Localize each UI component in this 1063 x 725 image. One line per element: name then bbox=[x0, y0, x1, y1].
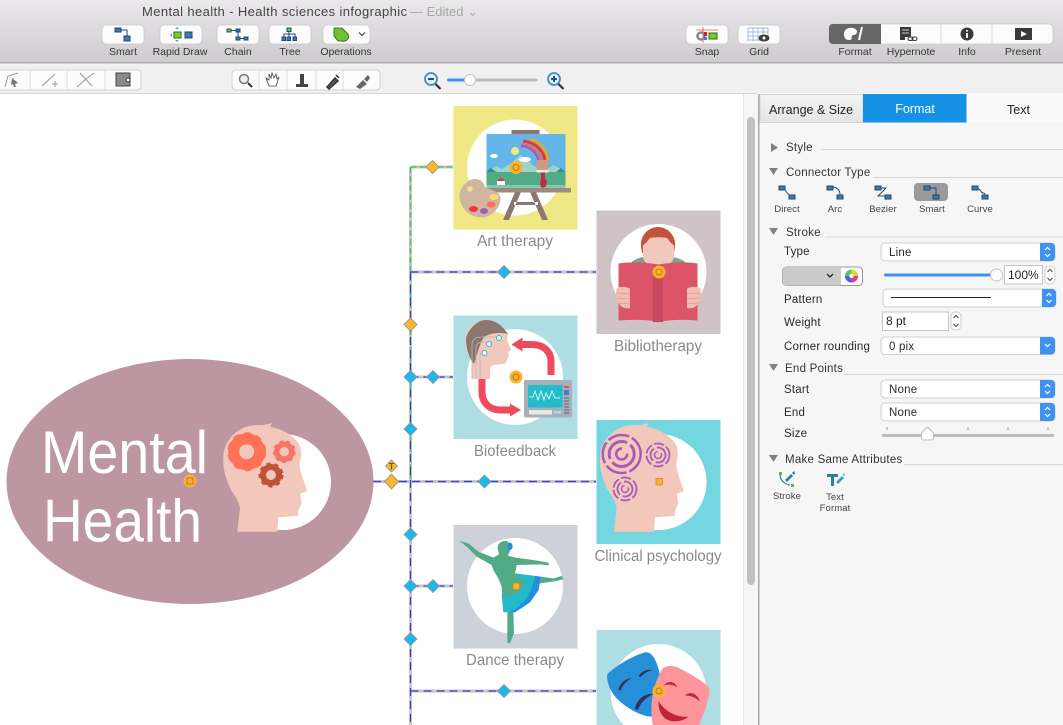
option: Direct: Direct bbox=[774, 204, 800, 215]
canvas scrollbar bbox=[743, 94, 758, 725]
connector lines bbox=[373, 167, 596, 725]
node: Clinical psychology bbox=[594, 420, 722, 565]
edited status: — Edited ⌄ bbox=[410, 4, 478, 19]
selection marker bbox=[184, 474, 196, 488]
option: Direct bbox=[774, 186, 800, 215]
select: End bbox=[881, 403, 1055, 421]
document title: Mental health - Health sciences infographic bbox=[142, 4, 408, 19]
button: Chain bbox=[217, 25, 259, 58]
select: Line bbox=[881, 243, 1055, 261]
button: Smart: Smart bbox=[109, 46, 137, 58]
section: Style bbox=[771, 142, 1063, 154]
icon: head, monitor and arrows bbox=[465, 320, 572, 425]
label: Present: Present bbox=[1005, 46, 1041, 58]
label: Weight: Weight bbox=[784, 317, 821, 329]
label: Size: Size bbox=[784, 428, 807, 440]
select: Start bbox=[881, 380, 1055, 398]
connector handles bbox=[384, 160, 510, 698]
icon: ballerina bbox=[459, 538, 564, 643]
icon: palette bbox=[844, 28, 857, 40]
button: Snap: Snap bbox=[695, 46, 719, 58]
tile bbox=[454, 106, 578, 230]
icon: head with gears bbox=[223, 423, 331, 532]
option: Arc bbox=[827, 186, 843, 215]
icon: info bbox=[960, 28, 974, 40]
select: Line: Line bbox=[889, 247, 912, 259]
action: Text Format: Text bbox=[826, 492, 844, 503]
size slider bbox=[882, 427, 1054, 440]
selection marker bbox=[510, 370, 522, 384]
label: End: End bbox=[784, 407, 805, 419]
option: Curve: Curve bbox=[967, 204, 993, 215]
icon: hypernote bbox=[900, 27, 917, 40]
secondary toolbar bbox=[0, 64, 1063, 94]
icon: brush stroke bbox=[859, 27, 862, 40]
colour well bbox=[782, 267, 862, 286]
section: Connector Type: Connector Type bbox=[786, 167, 870, 179]
action: Stroke: Stroke bbox=[773, 491, 801, 502]
button: Snap bbox=[686, 25, 728, 58]
icon: present bbox=[1015, 28, 1032, 40]
icon: theatre masks bbox=[607, 644, 709, 725]
label: Dance therapy bbox=[466, 652, 564, 669]
select: Pattern bbox=[883, 289, 1056, 307]
field: Weight: 8 pt bbox=[886, 314, 907, 328]
button: Rapid Draw: Rapid Draw bbox=[153, 46, 208, 58]
section: Make Same Attributes bbox=[769, 454, 1063, 514]
opacity field bbox=[1004, 266, 1055, 284]
segmented control: Format Hypernote Info Present bbox=[829, 24, 1053, 58]
tab: Arrange & Size: Arrange & Size bbox=[769, 103, 853, 117]
section: Style: Style bbox=[786, 142, 813, 154]
field: Weight bbox=[882, 312, 961, 330]
action: Stroke bbox=[773, 471, 801, 502]
title: Mental: Mental bbox=[41, 419, 208, 486]
label: Hypernote: Hypernote bbox=[887, 46, 935, 58]
option: Bezier bbox=[869, 186, 897, 215]
label: Art therapy bbox=[477, 233, 553, 250]
action: Text Format: Format bbox=[820, 503, 851, 514]
select: Corner rounding bbox=[881, 337, 1055, 354]
selection marker bbox=[513, 583, 520, 590]
node: Dance therapy bbox=[454, 525, 578, 669]
label: Clinical psychology bbox=[594, 548, 722, 565]
label: Start: Start bbox=[784, 384, 810, 396]
option: Smart selected bbox=[914, 183, 948, 215]
section: Stroke: Stroke bbox=[786, 227, 821, 239]
select: Start: None bbox=[889, 384, 917, 396]
title: Health: Health bbox=[43, 488, 202, 554]
section: End Points bbox=[769, 363, 1063, 440]
button: Operations: Operations bbox=[320, 46, 372, 58]
tile bbox=[596, 210, 720, 334]
node: Bibliotherapy bbox=[596, 210, 720, 355]
icon: head with swirls bbox=[600, 423, 706, 532]
select: End: None bbox=[889, 407, 917, 419]
select: Corner rounding: 0 pix bbox=[889, 341, 914, 353]
tab: Format bbox=[863, 94, 966, 122]
button: Smart bbox=[102, 25, 144, 58]
button: Tree: Tree bbox=[279, 46, 301, 58]
root node: Mental Health bbox=[6, 359, 374, 604]
drawing tools group bbox=[0, 70, 141, 90]
button: Chain: Chain bbox=[224, 46, 252, 58]
tab: Arrange & Size bbox=[760, 94, 863, 122]
tab: Format: Format bbox=[895, 102, 935, 116]
label: Biofeedback bbox=[474, 443, 557, 460]
opacity slider bbox=[884, 269, 1002, 281]
zoom in icon bbox=[548, 73, 564, 89]
icon: person reading book bbox=[610, 224, 706, 322]
button: Grid: Grid bbox=[749, 46, 769, 58]
label: Info: Info bbox=[958, 46, 976, 58]
canvas tools group bbox=[232, 70, 380, 90]
zoom out icon bbox=[425, 73, 440, 89]
selection marker bbox=[652, 684, 666, 698]
icon: easel and palette bbox=[459, 120, 571, 220]
option: Smart selected: Smart bbox=[919, 204, 945, 215]
section: Make Same Attributes: Make Same Attributes bbox=[785, 454, 902, 466]
selection marker bbox=[656, 478, 662, 485]
tile bbox=[454, 525, 578, 648]
section: Connector Type bbox=[769, 167, 1063, 215]
option: Curve bbox=[967, 186, 993, 215]
selection marker bbox=[652, 266, 666, 278]
tile bbox=[596, 420, 720, 544]
tab: Text: Text bbox=[1007, 103, 1030, 117]
label: Corner rounding: Corner rounding bbox=[784, 341, 870, 353]
text handle glyph: T bbox=[389, 462, 395, 472]
ellipse bbox=[6, 359, 374, 604]
zoom slider bbox=[447, 74, 538, 86]
label: Pattern: Pattern bbox=[784, 294, 822, 306]
tile bbox=[454, 316, 578, 439]
format panel bbox=[758, 94, 1063, 725]
label: Format: Format bbox=[838, 46, 872, 58]
action: Text Format bbox=[820, 473, 851, 514]
button: Grid bbox=[738, 25, 780, 58]
option: Bezier: Bezier bbox=[869, 204, 897, 215]
button: Operations bbox=[320, 25, 372, 58]
node: Drama therapy tile bbox=[596, 630, 720, 725]
node: Art therapy bbox=[454, 106, 578, 250]
opacity field: 100% bbox=[1008, 268, 1039, 282]
label: Type: Type bbox=[784, 246, 810, 258]
section: Stroke bbox=[769, 227, 1063, 354]
button: Tree bbox=[269, 25, 311, 58]
selection marker bbox=[510, 161, 522, 174]
tile bbox=[596, 630, 720, 725]
tab: Text bbox=[967, 94, 1063, 122]
label: Bibliotherapy bbox=[614, 338, 702, 355]
section: End Points: End Points bbox=[785, 363, 843, 375]
node: Biofeedback bbox=[454, 316, 578, 460]
option: Arc: Arc bbox=[828, 204, 842, 215]
button: Rapid Draw bbox=[153, 25, 208, 58]
